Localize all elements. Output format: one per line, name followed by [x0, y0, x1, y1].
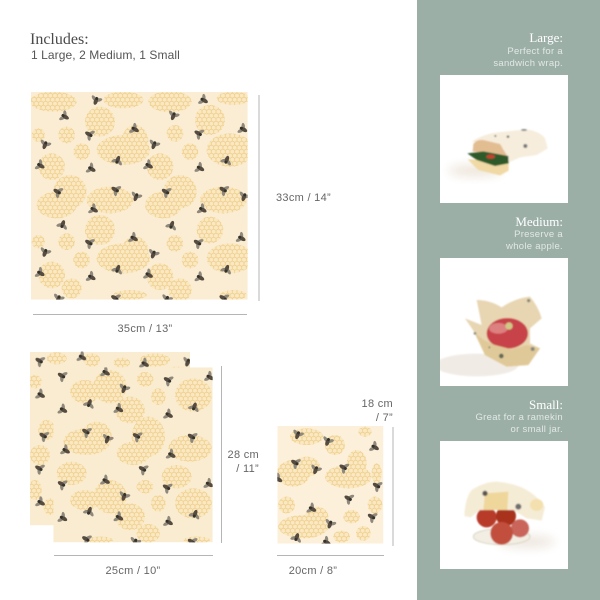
- dimension: small height: / 7”: [376, 412, 393, 424]
- dimension: medium height: / 11”: [236, 463, 259, 475]
- text: medium use: whole apple.: [505, 241, 563, 252]
- contents list: 1 Large, 2 Medium, 1 Small: [31, 48, 180, 62]
- photo: jar in wrap: [440, 441, 568, 569]
- dimension: medium height: [221, 366, 259, 543]
- dimension: medium width: 25cm / 10”: [106, 565, 161, 577]
- dimension: large height: 33cm / 14”: [276, 192, 331, 204]
- text: small use: [475, 397, 563, 435]
- panel: uses sidebar: [417, 0, 600, 600]
- text: small use: or small jar.: [511, 424, 563, 435]
- medium wrap: front: [53, 365, 217, 550]
- dimension: medium height: 28 cm: [228, 449, 259, 461]
- dimension: small height: 18 cm: [362, 398, 393, 410]
- text: large use: [493, 30, 563, 69]
- large wrap: [30, 91, 253, 306]
- photo: apple in wrap: [435, 258, 568, 386]
- dimension: small width: [277, 555, 384, 577]
- dimension: large width: 35cm / 13”: [118, 323, 173, 335]
- text: large use: sandwich wrap.: [493, 58, 563, 69]
- text: large use: Large:: [529, 30, 563, 45]
- dimension: small height: [362, 398, 394, 546]
- text: large use: Perfect for a: [507, 46, 563, 57]
- text: medium use: Preserve a: [514, 229, 563, 240]
- text: medium use: Medium:: [515, 214, 563, 229]
- heading: includes: [30, 31, 180, 62]
- photo: sandwich in wrap: [440, 75, 568, 203]
- text: small use: Small:: [529, 397, 563, 412]
- text: small use: Great for a ramekin: [475, 412, 563, 423]
- small wrap: [277, 426, 384, 544]
- title: Includes:: [30, 31, 89, 48]
- medium wrap: back: [28, 349, 195, 525]
- dimension: small width: 20cm / 8”: [289, 565, 337, 577]
- text: medium use: [505, 214, 563, 252]
